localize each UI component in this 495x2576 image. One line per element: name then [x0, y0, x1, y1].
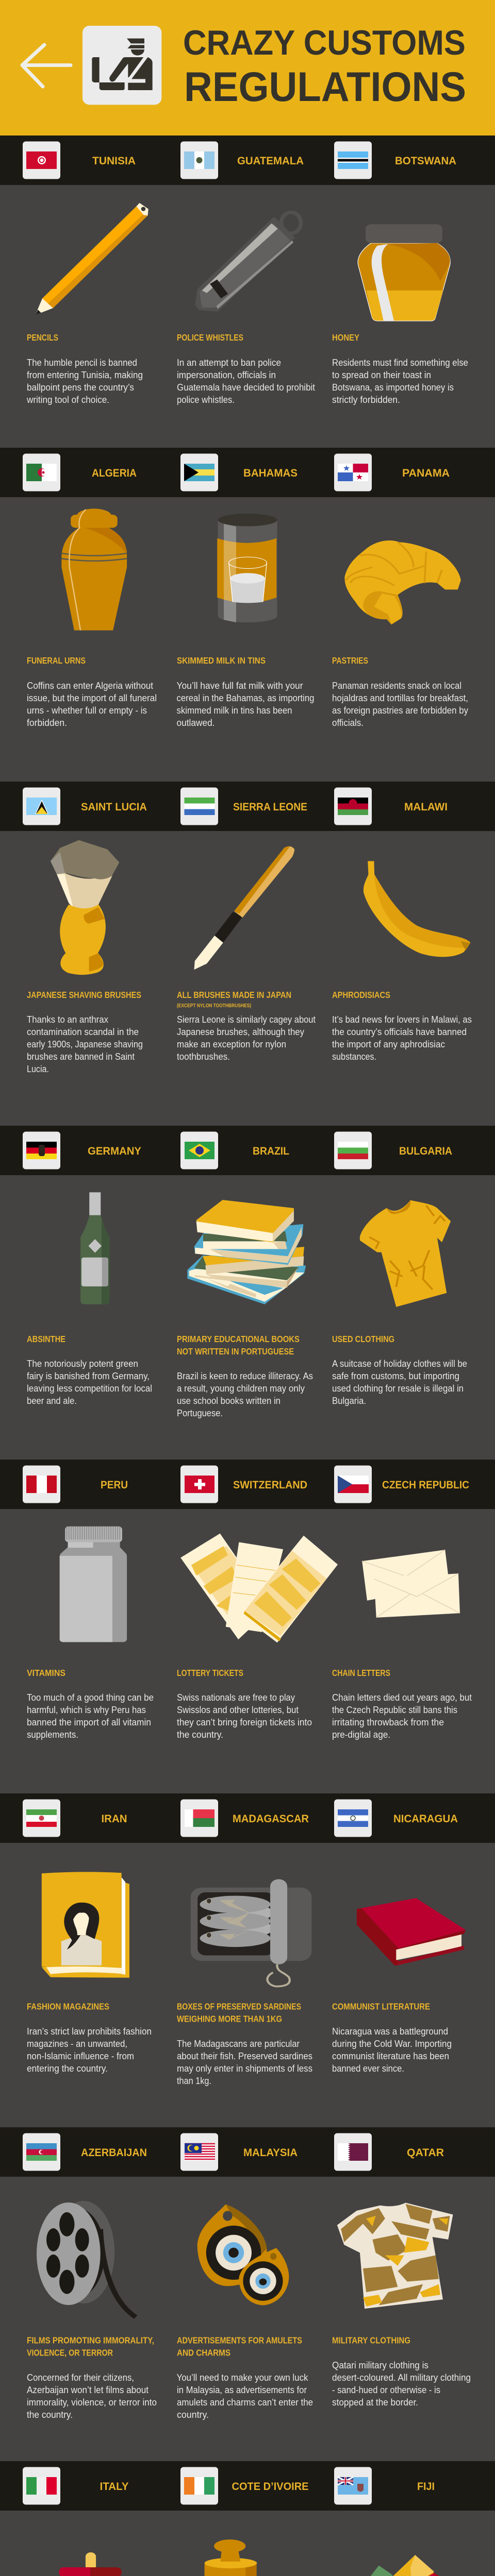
item: primary educational books: a result, young children may only [177, 1383, 305, 1394]
item: pastries: hojaldras and tortillas for breakfast, [332, 693, 468, 703]
item: honey: strictly forbidden. [332, 395, 400, 405]
illustration: wooden stacking toy [37, 2552, 145, 2576]
item: amulet advertisements: amulets and charms can’t enter the [177, 2397, 313, 2408]
item: honey: Botswana, as imported honey is [332, 382, 454, 393]
illustration: funeral urn [61, 509, 127, 630]
item: military clothing [332, 2335, 471, 2408]
item: lottery tickets: Swisslos and other lotteries, but [177, 1705, 299, 1715]
label: Qatar: QATAR [407, 2147, 444, 2159]
item: used clothing: A suitcase of holiday clothes will be [332, 1359, 467, 1369]
item: absinthe [27, 1334, 152, 1406]
item: vitamins: Too much of a good thing can be [27, 1692, 154, 1703]
item: all brushes made in Japan: Sierra Leone is similarly cagey about [177, 1014, 316, 1025]
item: Japanese shaving brushes: Thanks to an anthrax [27, 1014, 108, 1025]
country band [0, 1793, 495, 1843]
label: Fiji: FIJI [417, 2481, 435, 2493]
item: vitamins: harmful, which is why Peru has [27, 1705, 146, 1715]
label: Bulgaria: BULGARIA [399, 1145, 452, 1157]
item: communist literature: Nicaragua was a battleground [332, 2026, 448, 2037]
illustration: banana [364, 861, 470, 957]
item: preserved sardines: BOXES OF PRESERVED SARDINES [177, 2001, 301, 2011]
item: films: immorality, violence, or terror into [27, 2397, 157, 2408]
item: amulet advertisements: in Malaysia, as advertisements for [177, 2385, 307, 2395]
item: preserved sardines: about their fish. Preserved sardines [177, 2051, 312, 2061]
label: Germany: GERMANY [88, 1145, 141, 1157]
flag: Peru [23, 1465, 60, 1503]
item: pastries [332, 655, 468, 728]
label: Sierra Leone: SIERRA LEONE [233, 801, 307, 813]
country band [0, 1460, 495, 1509]
item: preserved sardines: The Madagascans are particular [177, 2039, 300, 2049]
item: military clothing: MILITARY CLOTHING [332, 2335, 410, 2345]
item: Japanese shaving brushes: early 1900s, Japanese shaving [27, 1039, 143, 1049]
item: pastries: officials. [332, 718, 364, 728]
label: Nicaragua: NICARAGUA [393, 1813, 458, 1825]
flag: Brazil [180, 1131, 218, 1170]
flag: Switzerland [180, 1465, 218, 1503]
item: vitamins: supplements. [27, 1730, 78, 1740]
item: funeral urns: FUNERAL URNS [27, 655, 86, 666]
row 6: Iran, Madagascar, Nicaragua [0, 1793, 495, 2086]
label: Botswana: BOTSWANA [395, 155, 456, 167]
row 2: Algeria, Bahamas, Panama [0, 448, 495, 728]
item: skimmed milk in tins: cereal in the Bahamas, as importing [176, 693, 315, 703]
item: all brushes made in Japan: toothbrushes. [177, 1052, 230, 1062]
flag: Panama [334, 453, 372, 492]
flag: Guatemala [180, 141, 218, 179]
label: Iran: IRAN [101, 1813, 127, 1825]
item: vitamins [27, 1668, 154, 1740]
label: Malaysia: MALAYSIA [243, 2147, 298, 2159]
item: films [27, 2335, 157, 2420]
item: vitamins: VITAMINS [27, 1668, 65, 1678]
flag: Malaysia [180, 2133, 218, 2171]
flag: Azerbaijan [23, 2133, 60, 2171]
item: vitamins: banned the import of all vitamin [27, 1717, 151, 1727]
item: used clothing: USED CLOTHING [332, 1334, 394, 1344]
item: police whistles: In an attempt to ban police [177, 358, 281, 368]
illustration: sardine tin [191, 1879, 311, 1987]
item: amulet advertisements: country. [177, 2410, 209, 2420]
item: funeral urns: urns - whether full or empty - is [27, 705, 147, 716]
flag: Malawi [334, 787, 372, 825]
item: honey: HONEY [332, 332, 359, 343]
item: all brushes made in Japan: make an exception for nylon [177, 1039, 286, 1049]
item: pencils: writing tool of choice. [26, 395, 109, 405]
item: pencils: The humble pencil is banned [27, 358, 137, 368]
title: REGULATIONS [184, 64, 466, 110]
illustration: metric weights [205, 2539, 279, 2576]
label: Guatemala: GUATEMALA [237, 155, 304, 167]
item: military clothing: - sand-hued or otherwise - is [332, 2385, 440, 2395]
item: skimmed milk in tins: SKIMMED MILK IN TINS [177, 655, 266, 666]
item: films: the country. [27, 2410, 73, 2420]
flag: Germany [23, 1131, 60, 1170]
item: preserved sardines: WEIGHING MORE THAN 1KG [177, 2013, 282, 2024]
flag: Algeria [23, 453, 60, 492]
illustration: honey jar [358, 224, 450, 321]
label: Malawi: MALAWI [404, 801, 448, 813]
item: fashion magazines [27, 2001, 152, 2074]
label: Saint Lucia: SAINT LUCIA [81, 801, 147, 813]
item: police whistles: Guatemala have decided to prohibit [177, 382, 315, 393]
item: lottery tickets [177, 1668, 312, 1740]
label: Czech Republic: CZECH REPUBLIC [382, 1479, 469, 1491]
item: chain letters: the Czech Republic still bans this [332, 1705, 457, 1715]
item: primary educational books: Brazil is keen to reduce illiteracy. As [177, 1371, 313, 1381]
item: aphrodisiacs: It’s bad news for lovers in Malawi, as [332, 1014, 472, 1025]
item: funeral urns [27, 655, 157, 728]
item: all brushes made in Japan [177, 990, 316, 1062]
item: Japanese shaving brushes: JAPANESE SHAVING BRUSHES [27, 990, 141, 1000]
item: aphrodisiacs: the import of any aphrodisiac [332, 1039, 445, 1049]
item: aphrodisiacs: APHRODISIACS [332, 990, 390, 1000]
illustration: police whistle [195, 212, 301, 312]
item: police whistles: police whistles. [177, 395, 235, 405]
item: pastries: PASTRIES [332, 655, 368, 666]
country band [0, 1126, 495, 1175]
item: honey [332, 332, 468, 405]
item: police whistles: POLICE WHISTLES [177, 332, 243, 343]
label: Bahamas: BAHAMAS [243, 467, 298, 479]
item: chain letters [332, 1668, 472, 1740]
item: absinthe: leaving less competition for local [27, 1383, 152, 1394]
label: Brazil: BRAZIL [253, 1145, 289, 1157]
illustration: paint brush [194, 846, 294, 970]
item: fashion magazines: entering the country. [27, 2063, 108, 2074]
item: absinthe: ABSINTHE [27, 1334, 65, 1344]
title: CRAZY CUSTOMS [183, 23, 466, 62]
item: primary educational books [177, 1334, 313, 1418]
item: honey: to spread on their toast in [332, 370, 431, 380]
item: pencils: PENCILS [27, 332, 58, 343]
item: chain letters: Chain letters died out years ago, but [332, 1692, 472, 1703]
item: chain letters: irritating throwback from the [332, 1717, 444, 1727]
label: Tunisia: TUNISIA [92, 155, 136, 167]
item: all brushes made in Japan: ALL BRUSHES MADE IN JAPAN [177, 990, 291, 1000]
flag: Bahamas [180, 453, 218, 492]
item: aphrodisiacs [332, 990, 472, 1062]
item: Japanese shaving brushes: Lucia. [27, 1064, 49, 1074]
item: skimmed milk in tins: You’ll have full fat milk with your [176, 681, 303, 691]
item: all brushes made in Japan: (EXCEPT NYLON TOOTHBRUSHES) [177, 1003, 251, 1009]
country band [0, 2127, 495, 2177]
illustration: lottery tickets [180, 1534, 338, 1642]
item: lottery tickets: the country. [177, 1730, 223, 1740]
item: lottery tickets: Swiss nationals are free to play [177, 1692, 295, 1703]
flag: Botswana [334, 141, 372, 179]
label: Algeria: ALGERIA [92, 467, 137, 479]
flag: Qatar [334, 2133, 372, 2171]
item: skimmed milk in tins: skimmed milk in tins has been [176, 705, 292, 716]
item: communist literature: COMMUNIST LITERATURE [332, 2001, 430, 2011]
item: military clothing: Qatari military clothing is [332, 2360, 428, 2370]
item: lottery tickets: LOTTERY TICKETS [177, 1668, 243, 1678]
item: films: Concerned for their citizens, [27, 2372, 134, 2383]
country band [0, 135, 495, 185]
row 5: Peru, Switzerland, Czech Republic [0, 1460, 495, 1740]
label: Switzerland: SWITZERLAND [233, 1479, 307, 1491]
item: communist literature: banned ever since. [332, 2063, 404, 2074]
item: honey: Residents must find something else [332, 358, 468, 368]
item: used clothing: Bulgaria. [332, 1396, 366, 1406]
illustration: croissant [344, 540, 461, 624]
flag: Nicaragua [334, 1799, 372, 1837]
illustration: vitamin jar [60, 1527, 127, 1642]
item: used clothing: safe from customs, but importing [332, 1371, 459, 1381]
item: films: FILMS PROMOTING IMMORALITY, [27, 2335, 154, 2345]
label: Italy: ITALY [100, 2481, 129, 2493]
flag: Madagascar [180, 1799, 218, 1837]
flag: Bulgaria [334, 1131, 372, 1170]
item: amulet advertisements: ADVERTISEMENTS FOR AMULETS [177, 2335, 302, 2345]
item: primary educational books: PRIMARY EDUCATIONAL BOOKS [177, 1334, 300, 1344]
icon: customs officer [82, 26, 161, 105]
item: amulet advertisements: You’ll need to make your own luck [176, 2372, 308, 2383]
illustration: fashion magazine [42, 1872, 129, 1978]
item: amulet advertisements [176, 2335, 313, 2420]
item: absinthe: The notoriously potent green [27, 1359, 138, 1369]
illustration: film reel [37, 2201, 136, 2317]
item: pastries: Panaman residents snack on local [332, 681, 461, 691]
item: police whistles [177, 332, 315, 405]
item: lottery tickets: they can’t bring foreign tickets into [177, 1717, 312, 1727]
country band [0, 782, 495, 831]
item: fashion magazines: magazines - an unwanted, [27, 2039, 127, 2049]
flag: Iran [23, 1799, 60, 1837]
country band [0, 448, 495, 497]
illustration: pencil [36, 203, 148, 315]
item: communist literature: communist literature has been [332, 2051, 449, 2061]
item: Japanese shaving brushes: brushes are banned in Saint [27, 1052, 135, 1062]
item: aphrodisiacs: substances. [332, 1052, 376, 1062]
item: aphrodisiacs: the country’s officials have banned [332, 1027, 467, 1037]
item: primary educational books: NOT WRITTEN IN PORTUGUESE [177, 1346, 294, 1357]
item: Japanese shaving brushes [27, 990, 143, 1074]
item: primary educational books: use school books written in [177, 1396, 280, 1406]
item: amulet advertisements: AND CHARMS [177, 2347, 230, 2358]
illustration: absinthe bottle [80, 1192, 109, 1304]
item: chain letters: CHAIN LETTERS [332, 1668, 390, 1678]
item: military clothing: stopped at the border. [332, 2397, 418, 2408]
item: pencils: from entering Tunisia, making [27, 370, 143, 380]
item: primary educational books: Portuguese. [177, 1408, 223, 1418]
item: skimmed milk in tins: outlawed. [176, 718, 214, 728]
row 3: Saint Lucia, Sierra Leone, Malawi [0, 782, 495, 1074]
illustration: milk tin [217, 514, 277, 622]
illustration: shaving brush [51, 840, 119, 975]
row 1: Tunisia, Guatemala, Botswana [0, 135, 495, 405]
label: Panama: PANAMA [402, 467, 450, 479]
label: Peru: PERU [101, 1479, 128, 1491]
flag: Sierra Leone [180, 787, 218, 825]
item: used clothing: used clothing for resale is illegal in [332, 1383, 464, 1394]
label: Cote d'Ivoire: COTE D’IVOIRE [232, 2481, 308, 2493]
row 7: Azerbaijan, Malaysia, Qatar [0, 2127, 495, 2420]
item: communist literature: during the Cold War. Importing [332, 2039, 452, 2049]
item: films: Azerbaijan won’t let films about [27, 2385, 148, 2395]
illustration: red book [357, 1898, 466, 1965]
row 8: Italy, Cote d'Ivoire, Fiji [0, 2461, 495, 2576]
item: funeral urns: forbidden. [27, 718, 67, 728]
country band [0, 2461, 495, 2511]
label: Madagascar: MADAGASCAR [233, 1813, 309, 1825]
row 4: Germany, Brazil, Bulgaria [0, 1126, 495, 1418]
flag: Saint Lucia [23, 787, 60, 825]
item: communist literature [332, 2001, 452, 2074]
item: preserved sardines: than 1kg. [177, 2076, 211, 2086]
illustration: piles of dye [353, 2555, 467, 2576]
item: all brushes made in Japan: Japanese brushes, although they [177, 1027, 304, 1037]
item: Japanese shaving brushes: contamination scandal in the [27, 1027, 139, 1037]
flag: Fiji [334, 2467, 372, 2505]
item: funeral urns: issue, but the import of all funeral [27, 693, 157, 703]
flag: Cote d'Ivoire [180, 2467, 218, 2505]
item: pencils: ballpoint pens the country’s [27, 382, 134, 393]
header [0, 0, 495, 135]
item: absinthe: fairy is banished from Germany, [27, 1371, 150, 1381]
item: police whistles: impersonation, officials in [177, 370, 276, 380]
item: fashion magazines: FASHION MAGAZINES [27, 2001, 109, 2011]
item: preserved sardines [177, 2001, 312, 2086]
item: funeral urns: Coffins can enter Algeria without [27, 681, 153, 691]
item: pastries: as foreign pastries are forbidden by [332, 705, 468, 716]
flag: Tunisia [23, 141, 60, 179]
arrow: pointing left [22, 45, 71, 87]
illustration: amulets [197, 2205, 289, 2305]
item: military clothing: desert-coloured. All military clothing [332, 2372, 471, 2383]
item: used clothing [332, 1334, 467, 1406]
item: absinthe: beer and ale. [27, 1396, 77, 1406]
illustration: camouflage shirt [337, 2203, 453, 2309]
item: fashion magazines: Iran’s strict law prohibits fashion [27, 2026, 152, 2037]
flag: Czech Republic [334, 1465, 372, 1503]
item: pencils [26, 332, 143, 405]
item: preserved sardines: may only enter in shipments of less [177, 2063, 312, 2074]
item: films: VIOLENCE, OR TERROR [27, 2347, 113, 2358]
illustration: used t-shirt [360, 1200, 451, 1307]
title [183, 23, 466, 110]
illustration: stack of books [187, 1200, 306, 1304]
item: skimmed milk in tins [176, 655, 315, 728]
flag: Italy [23, 2467, 60, 2505]
illustration: chain letters [362, 1550, 460, 1618]
item: fashion magazines: non-Islamic influence - from [27, 2051, 134, 2061]
label: Azerbaijan: AZERBAIJAN [81, 2147, 147, 2159]
item: chain letters: pre-digital age. [332, 1730, 390, 1740]
